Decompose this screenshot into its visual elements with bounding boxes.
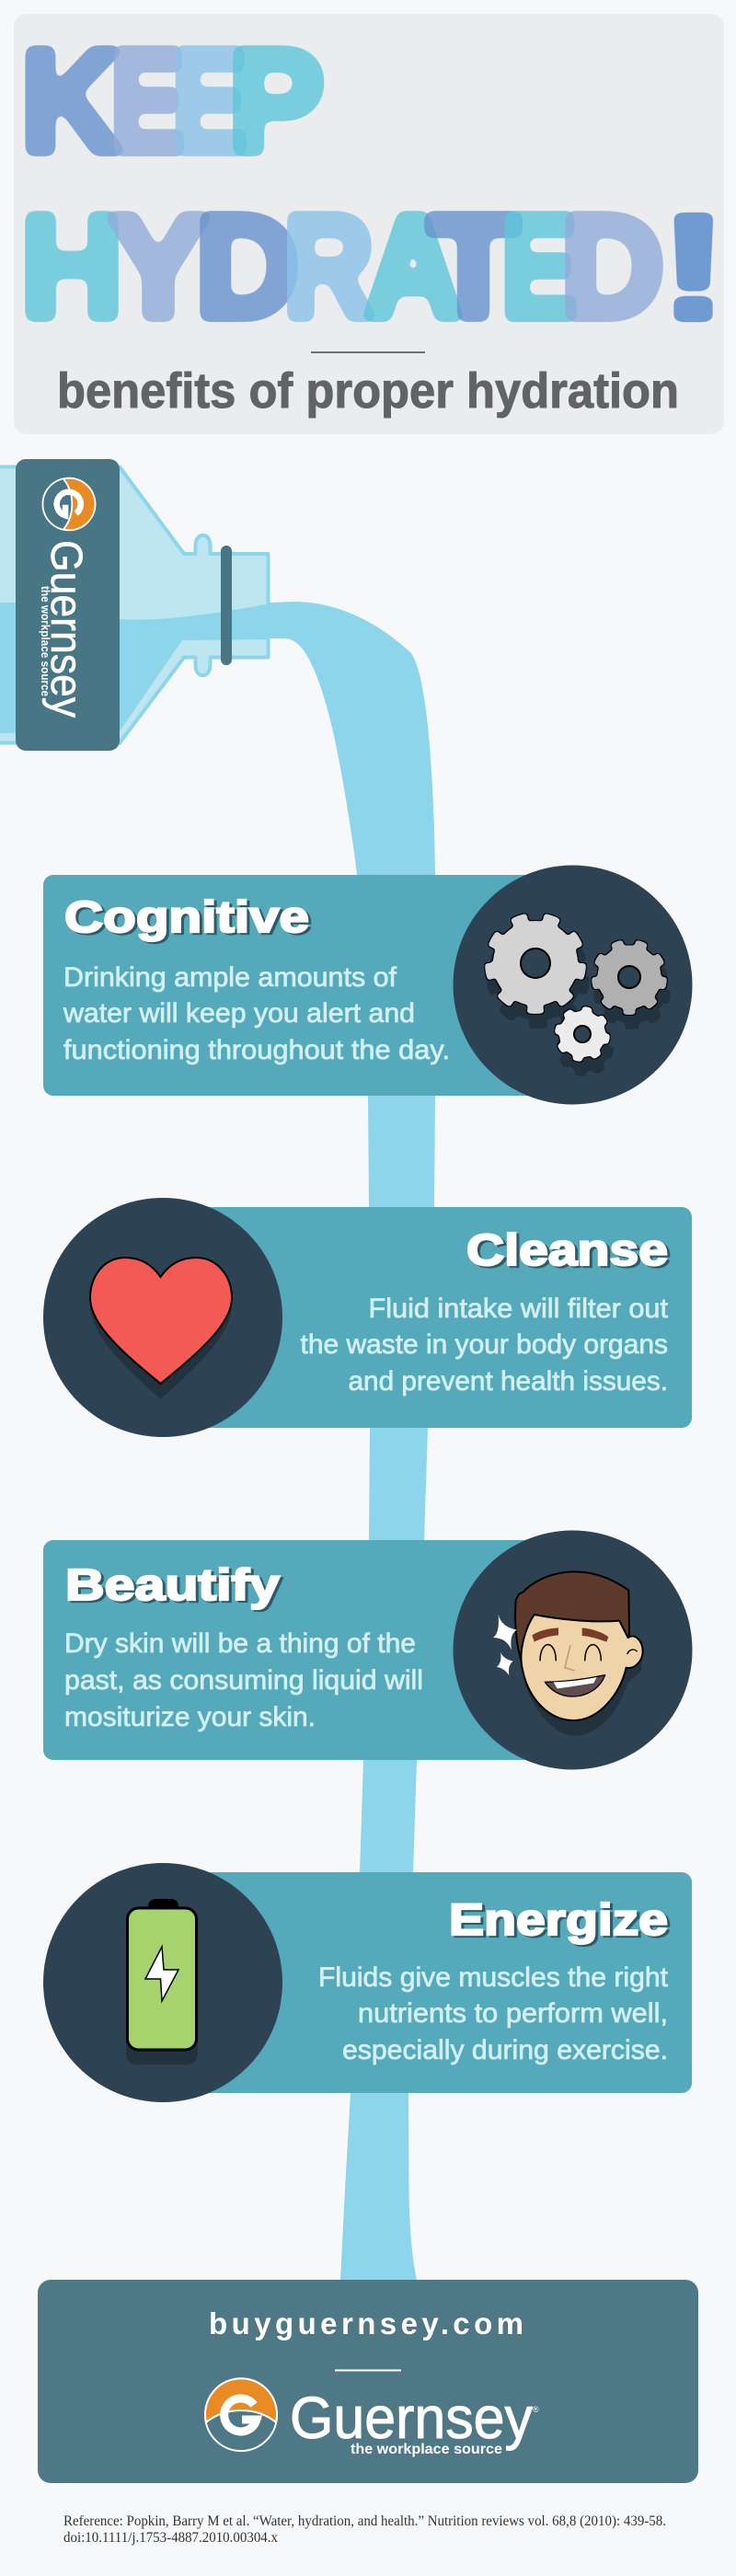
heading: KEEP bbox=[21, 18, 324, 182]
logo wordmark: Guernsey bbox=[290, 2385, 533, 2451]
heading: Cleanse: Cleanse bbox=[466, 1226, 668, 1275]
text: reference: doi:10.1111/j.1753-4887.2010.00304.x bbox=[63, 2530, 278, 2546]
icon: smiling face bbox=[493, 1571, 643, 1736]
panel: Cognitive bbox=[43, 865, 692, 1104]
heading: HYDRATED! bbox=[21, 183, 730, 351]
water stream bbox=[270, 602, 435, 2280]
panel: Energize bbox=[43, 1863, 692, 2102]
heading: KEEP: E bbox=[110, 19, 184, 182]
icon: heart bbox=[90, 1258, 232, 1399]
logo wordmark rotated: Guernsey bbox=[41, 540, 90, 718]
heading: HYDRATED!: E bbox=[501, 186, 577, 349]
heading: Energize: Energize bbox=[449, 1896, 668, 1945]
text: Energize body: Fluids give muscles the right bbox=[318, 1962, 669, 1993]
logo icon: rotated G bbox=[42, 478, 96, 530]
heading: HYDRATED!: Y bbox=[109, 185, 208, 347]
text: Cleanse body bbox=[300, 1294, 669, 1397]
heading: HYDRATED!: D bbox=[196, 186, 299, 348]
bottle bbox=[0, 459, 270, 751]
panel: Cleanse bbox=[43, 1198, 692, 1437]
text: Cleanse body: and prevent health issues. bbox=[348, 1366, 668, 1397]
text: reference: Reference: Popkin, Barry M et al. “Water, hydration, and health.” Nutrition reviews vol. 68,8 (2010): 439-58. bbox=[63, 2513, 666, 2529]
text: Cognitive body: Drinking ample amounts of bbox=[63, 962, 397, 993]
heading: HYDRATED!: A bbox=[364, 186, 462, 348]
bottle ring bbox=[221, 546, 232, 665]
text: reference bbox=[63, 2513, 666, 2546]
text: Energize body: especially during exercise. bbox=[342, 2035, 668, 2065]
footer url: buyguernsey.com bbox=[209, 2306, 523, 2340]
heading: KEEP: P bbox=[229, 20, 324, 182]
panel: title header bbox=[14, 14, 730, 434]
text: Beautify body: past, as consuming liquid will bbox=[64, 1665, 423, 1696]
registered mark: ® bbox=[533, 2405, 539, 2414]
text: Energize body: nutrients to perform well, bbox=[358, 1998, 668, 2029]
bottle water bbox=[0, 603, 270, 733]
logo: Guernsey bbox=[205, 2378, 539, 2457]
logo tagline rotated: the workplace source bbox=[39, 586, 52, 696]
heading: HYDRATED!: ! bbox=[657, 183, 730, 351]
text: Cleanse body: the waste in your body organs bbox=[300, 1329, 668, 1360]
icon: gears bbox=[489, 918, 663, 1059]
text: Cognitive body: water will keep you alert and bbox=[63, 998, 415, 1029]
bottle label bbox=[16, 459, 120, 751]
text: Cleanse body: Fluid intake will filter out bbox=[368, 1294, 669, 1324]
logo icon bbox=[205, 2378, 277, 2451]
heading: HYDRATED!: H bbox=[21, 185, 122, 348]
text: Cognitive body bbox=[63, 962, 450, 1065]
logo tagline: the workplace source bbox=[351, 2442, 502, 2457]
heading: HYDRATED!: T bbox=[428, 185, 519, 348]
panel: Beautify bbox=[43, 1531, 692, 1770]
text: Cognitive body: functioning throughout the day. bbox=[63, 1035, 450, 1065]
icon: battery bbox=[126, 1899, 198, 2064]
text: Energize body bbox=[318, 1962, 669, 2065]
heading: KEEP: K bbox=[21, 18, 121, 182]
text: Beautify body bbox=[64, 1628, 423, 1732]
heading: KEEP: E bbox=[172, 19, 247, 182]
heading: Cognitive: Cognitive bbox=[64, 893, 309, 942]
heading: HYDRATED!: R bbox=[283, 186, 374, 348]
heading: Beautify: Beautify bbox=[65, 1561, 280, 1610]
text: Beautify body: Dry skin will be a thing of the bbox=[64, 1628, 416, 1659]
heading: HYDRATED!: D bbox=[561, 186, 664, 348]
subtitle: benefits of proper hydration bbox=[57, 363, 679, 419]
bottle glass bbox=[0, 467, 269, 743]
text: Beautify body: mositurize your skin. bbox=[64, 1702, 316, 1732]
panel: footer bbox=[38, 2280, 698, 2483]
